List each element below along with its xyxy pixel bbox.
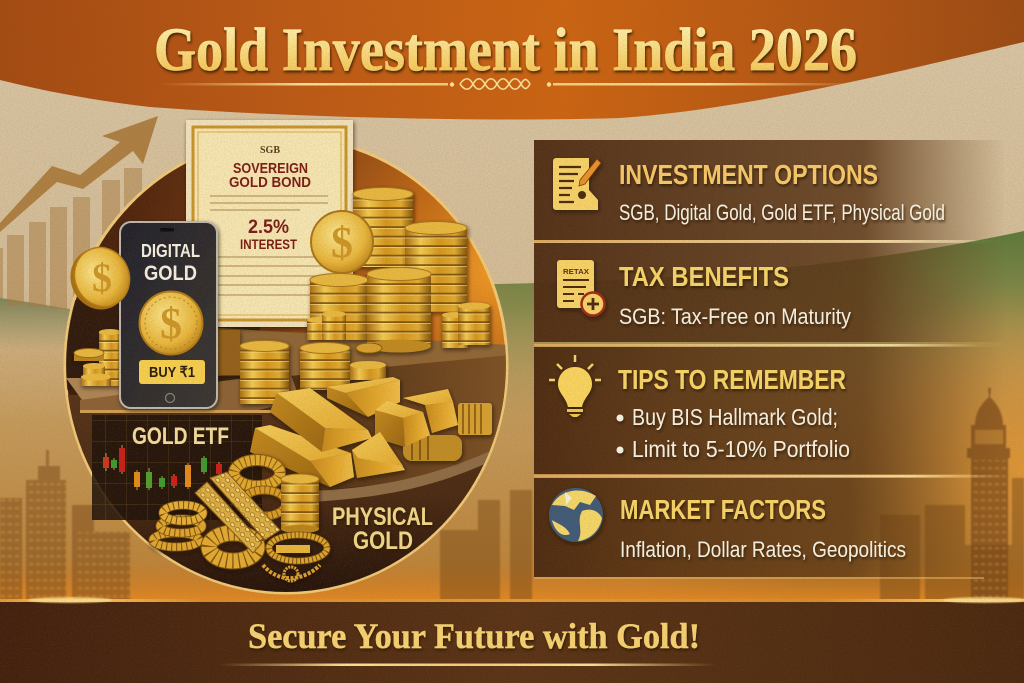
large top bar <box>270 388 372 452</box>
tips list: Limit to 5-10% Portfolio <box>632 436 850 462</box>
upper shelf <box>218 328 510 490</box>
tax text: SGB: Tax-Free on Maturity <box>619 304 851 329</box>
panel: tips to remember <box>534 347 1004 478</box>
ETF chart panel <box>92 415 262 520</box>
tax heading: TAX BENEFITS <box>619 261 789 292</box>
coin stacks on top shelf <box>307 188 490 353</box>
lower section base <box>60 395 510 595</box>
physical gold label: PHYSICAL <box>332 503 433 531</box>
gold etf label: GOLD ETF <box>132 423 229 450</box>
tips list: Buy BIS Hallmark Gold; <box>632 404 838 430</box>
bangle rear <box>234 460 280 486</box>
footer tagline: Secure Your Future with Gold! <box>248 616 700 656</box>
panel: market factors <box>534 478 984 579</box>
stack C <box>310 274 368 340</box>
city skyline <box>0 388 1024 600</box>
panel: investment options <box>534 140 1004 242</box>
panel: tax benefits <box>534 243 1004 346</box>
right skyline buildings <box>440 478 1024 600</box>
lower curved shelf <box>319 452 490 502</box>
gold coin over certificate <box>311 211 373 273</box>
coin stacks on left shelf <box>74 329 121 386</box>
gold coin in phone: $ <box>160 299 182 348</box>
rising arrow <box>0 116 158 232</box>
ridged bar piece <box>458 403 492 435</box>
gold jewellery <box>153 460 327 581</box>
title divider ornament <box>158 79 861 89</box>
tips heading: TIPS TO REMEMBER <box>618 364 846 395</box>
left buildings <box>0 450 130 600</box>
central gold disc <box>60 137 510 595</box>
phone heading <box>141 241 200 285</box>
upper left dark shade <box>60 300 260 390</box>
physical gold label <box>332 503 433 555</box>
stacked bangles <box>153 505 203 547</box>
sovereign gold bond certificate <box>186 120 353 327</box>
icon: light bulb <box>549 355 601 417</box>
buy button: BUY ₹1 <box>149 364 195 381</box>
market heading: MARKET FACTORS <box>620 494 826 525</box>
phone heading: GOLD <box>144 262 197 285</box>
growth chart backdrop <box>0 116 158 309</box>
stack B <box>405 222 467 312</box>
gold coin in phone <box>140 292 202 354</box>
rear bar <box>327 377 400 417</box>
certificate heading: SOVEREIGN <box>233 160 308 177</box>
sgb logo text: SGB <box>260 145 280 156</box>
lower right bar <box>352 432 405 478</box>
necklace chain <box>263 535 327 581</box>
stack D <box>367 268 431 352</box>
buy button <box>139 360 205 384</box>
top orange banner wave <box>0 0 1024 120</box>
gold coin over certificate: $ <box>331 218 353 267</box>
certificate text lines <box>210 196 328 295</box>
market text: Inflation, Dollar Rates, Geopolitics <box>620 537 906 562</box>
second bangle behind <box>242 490 286 516</box>
screw chain piece <box>403 435 462 461</box>
icon: document and pencil <box>553 158 601 210</box>
stack A <box>353 188 413 267</box>
candlesticks <box>103 445 222 490</box>
right bar B <box>403 389 458 433</box>
icon: tax document <box>557 260 604 316</box>
bottom ring <box>209 533 257 561</box>
small stacks <box>307 302 490 353</box>
physical gold label: GOLD <box>353 527 413 555</box>
interest rate: 2.5% <box>248 217 289 238</box>
gold coin floating left: $ <box>92 255 112 300</box>
lower left bar <box>250 425 354 487</box>
coin stacks on middle shelf <box>218 330 386 404</box>
disc backing <box>65 137 507 593</box>
title: Gold Investment in India 2026 <box>154 17 857 84</box>
small coin stack <box>281 474 319 533</box>
certificate heading: INTEREST <box>240 236 297 252</box>
tips list <box>616 404 850 462</box>
certificate heading <box>229 160 311 252</box>
investment heading: INVESTMENT OPTIONS <box>619 159 878 190</box>
chart bars <box>0 168 142 309</box>
footer bar <box>0 597 1024 683</box>
left shelf <box>66 376 296 413</box>
domed tower <box>967 388 1010 600</box>
gold coin floating left <box>61 238 139 319</box>
certificate heading: GOLD BOND <box>229 174 311 191</box>
gold bars <box>250 377 492 487</box>
right bar A <box>375 401 430 447</box>
icon: globe <box>549 488 603 542</box>
phone heading: DIGITAL <box>141 241 200 261</box>
digital gold phone <box>120 222 217 408</box>
diagonal bracelets <box>195 472 280 553</box>
icon: tax document: RETAX <box>563 269 589 276</box>
